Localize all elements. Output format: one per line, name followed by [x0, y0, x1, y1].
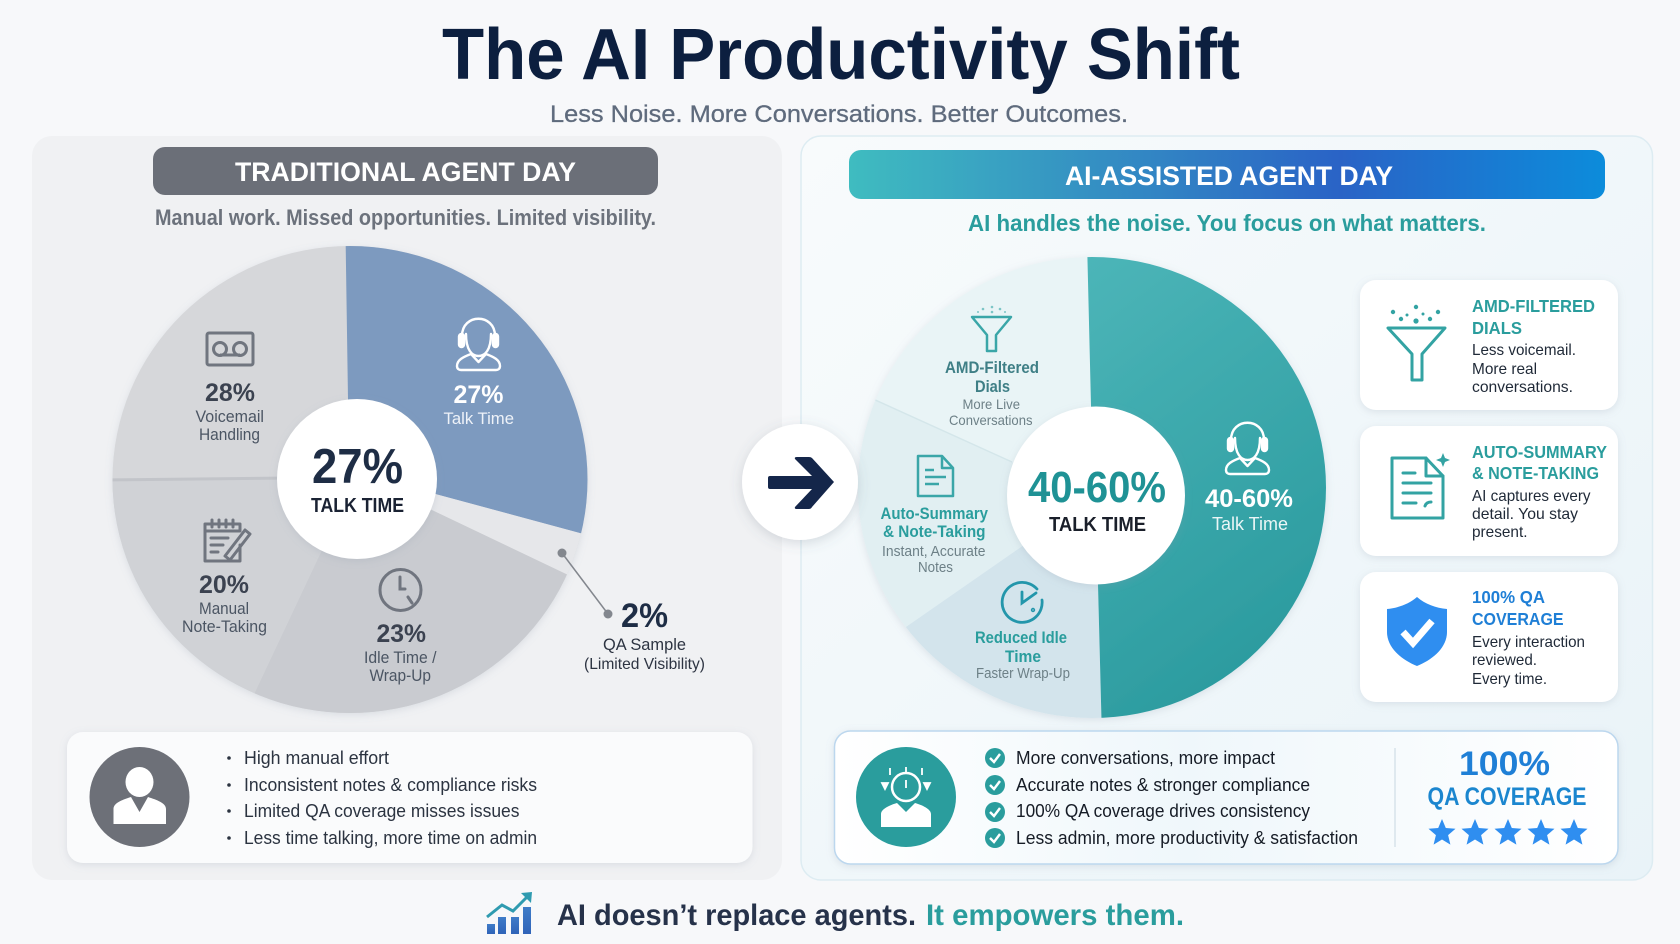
icon: notepad and pencil [205, 520, 250, 561]
slice label: 40-60% talk time: Talk Time [1212, 514, 1288, 534]
slice label: manual note-taking: Note-Taking [182, 618, 267, 636]
icon: document [918, 456, 953, 496]
panel background [801, 136, 1652, 880]
panel heading [153, 147, 658, 195]
slice label: manual note-taking: 20% [199, 571, 249, 599]
panel tagline: Manual work. Missed opportunities. Limited visibility. [155, 205, 656, 230]
callout: QA sample 2%: QA Sample [603, 635, 686, 654]
check list [985, 747, 1358, 848]
slice label: voicemail handling: Voicemail [196, 408, 264, 426]
icon: shield with check [1387, 597, 1447, 666]
slice label: reduced idle time: Faster Wrap-Up [976, 666, 1070, 682]
card: 100% QA coverage: Every time. [1472, 671, 1547, 688]
slice label: idle time and wrap-up: Idle Time / [364, 649, 437, 667]
slice label: idle time and wrap-up: Wrap-Up [370, 667, 431, 685]
panel tagline: AI handles the noise. You focus on what matters. [968, 210, 1486, 236]
center stat: 40-60% talk time [1007, 406, 1185, 584]
pie chart: AI-assisted time split [857, 257, 1328, 722]
slice label: auto-summary and note-taking: & Note-Taking [883, 522, 986, 541]
slice label: auto-summary and note-taking: Notes [918, 560, 953, 576]
icon: document with sparkle [1392, 453, 1450, 518]
slice label: reduced idle time [975, 582, 1070, 682]
card: auto-summary and note-taking [1360, 426, 1618, 556]
panel: traditional agent day [32, 136, 782, 880]
slice label: 40-60% talk time: 40-60% [1205, 485, 1293, 513]
card: AI-assisted benefits [834, 731, 1618, 864]
slice label: AMD-filtered dials: Conversations [949, 412, 1032, 428]
callout: QA sample 2% [558, 548, 705, 673]
card: traditional drawbacks [67, 732, 752, 863]
closing statement: AI doesn’t replace agents. [557, 899, 916, 932]
subtitle: Less Noise. More Conversations. Better Outcomes. [550, 101, 1128, 128]
center stat: 27% talk time: 27% [312, 440, 403, 494]
card: AMD-filtered dials: AMD-FILTERED [1472, 296, 1595, 316]
closing statement: It empowers them. [926, 899, 1184, 932]
check list: 100% QA coverage drives consistency [1016, 800, 1311, 821]
slice label: AMD-filtered dials: Dials [975, 378, 1010, 396]
stat: 100% QA coverage with stars [1428, 745, 1588, 845]
slice label: voicemail handling: Handling [199, 426, 260, 444]
panel heading: TRADITIONAL AGENT DAY [235, 157, 576, 187]
panel heading [849, 150, 1605, 199]
footer: closing message [487, 892, 1184, 934]
card: 100% QA coverage: COVERAGE [1472, 609, 1564, 629]
card: AMD-filtered dials: DIALS [1472, 318, 1522, 338]
card: auto-summary and note-taking: & NOTE-TAKING [1472, 463, 1599, 483]
stat: 100% QA coverage with stars: QA COVERAGE [1428, 783, 1586, 811]
slice label: auto-summary and note-taking: Auto-Summary [880, 504, 988, 523]
center stat: 40-60% talk time: TALK TIME [1049, 514, 1146, 536]
panel: AI-assisted agent day [801, 136, 1652, 880]
card: 100% QA coverage [1360, 572, 1618, 702]
card: 100% QA coverage: 100% QA [1472, 587, 1545, 607]
slice label: voicemail handling: 28% [205, 379, 255, 407]
slice label: AMD-filtered dials [945, 306, 1039, 428]
title: The AI Productivity Shift [442, 15, 1240, 95]
slice label: voicemail handling [196, 333, 264, 444]
slice label: talk time [444, 319, 514, 428]
closing statement [557, 899, 1184, 932]
card: AMD-filtered dials: conversations. [1472, 379, 1573, 396]
callout: QA sample 2%: 2% [621, 597, 668, 635]
check list: Less admin, more productivity & satisfaction [1016, 827, 1358, 848]
slice label: idle time and wrap-up: 23% [376, 620, 426, 648]
check list: Accurate notes & stronger compliance [1016, 774, 1310, 795]
slice label: reduced idle time: Reduced Idle [975, 628, 1067, 647]
pie chart: traditional time split [111, 246, 589, 716]
slice label: talk time: Talk Time [444, 410, 514, 428]
slice label: manual note-taking [182, 520, 267, 636]
icon: agent headset [1226, 423, 1269, 474]
card: auto-summary and note-taking: present. [1472, 524, 1528, 541]
bullet list: High manual effort [244, 747, 389, 768]
card: AMD-filtered dials: More real [1472, 361, 1537, 378]
slice label: reduced idle time: Time [1005, 647, 1041, 666]
center stat: 40-60% talk time: 40-60% [1028, 463, 1166, 512]
slice label: AMD-filtered dials: More Live [962, 396, 1020, 412]
center stat: 27% talk time: TALK TIME [311, 495, 404, 517]
card: auto-summary and note-taking: detail. You stay [1472, 506, 1578, 523]
card: 100% QA coverage: reviewed. [1472, 652, 1537, 669]
slice label: talk time: 27% [454, 381, 504, 409]
card: auto-summary and note-taking: AUTO-SUMMARY [1472, 442, 1607, 462]
callout: QA sample 2%: (Limited Visibility) [584, 656, 705, 673]
card: AMD-filtered dials: Less voicemail. [1472, 342, 1576, 359]
slice label: manual note-taking: Manual [199, 600, 249, 618]
icon: agent headset [457, 319, 500, 370]
slice label: idle time and wrap-up [364, 570, 437, 685]
icon: funnel [1388, 305, 1445, 380]
bullet list: Inconsistent notes & compliance risks [244, 774, 537, 795]
icon: agent avatar [90, 747, 190, 847]
bullet list [227, 747, 537, 848]
card: AMD-filtered dials [1360, 280, 1618, 410]
icon: rising bar chart [487, 892, 532, 934]
icon: focused agent avatar [856, 747, 956, 847]
slice label: 40-60% talk time [1205, 423, 1293, 534]
center stat: 27% talk time [277, 399, 437, 559]
icon: funnel [972, 306, 1011, 351]
card: auto-summary and note-taking: AI captures every [1472, 488, 1590, 505]
slice label: auto-summary and note-taking: Instant, Accurate [882, 544, 986, 560]
icon: voicemail [207, 333, 253, 365]
slice label: auto-summary and note-taking [880, 456, 988, 576]
bullet list: Limited QA coverage misses issues [244, 800, 520, 821]
arrow: traditional to AI-assisted [742, 424, 858, 540]
icon: stopwatch [1002, 582, 1042, 622]
panel heading: AI-ASSISTED AGENT DAY [1065, 161, 1393, 191]
stat: 100% QA coverage with stars: 100% [1459, 745, 1550, 783]
card: 100% QA coverage: Every interaction [1472, 634, 1585, 651]
bullet list: Less time talking, more time on admin [244, 827, 537, 848]
slice label: AMD-filtered dials: AMD-Filtered [945, 359, 1039, 377]
panel background [32, 136, 782, 880]
icon: clock [380, 570, 421, 610]
check list: More conversations, more impact [1016, 747, 1275, 768]
